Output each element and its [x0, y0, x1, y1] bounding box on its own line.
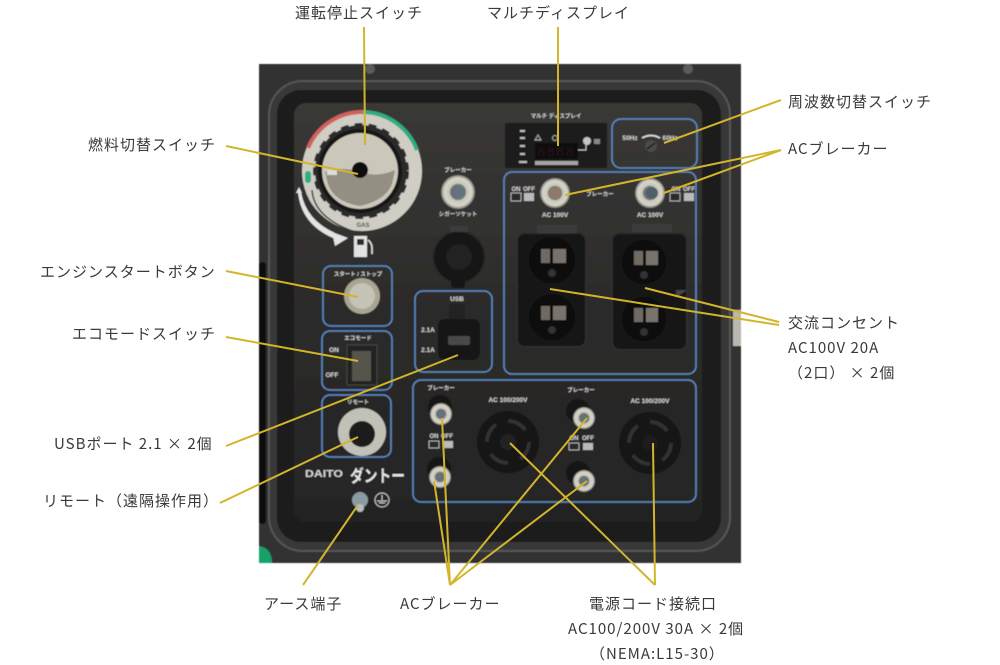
breaker and cigar socket — [433, 166, 485, 288]
label: frequency: 周波数切替スイッチ — [788, 91, 932, 112]
logo: DAITO — [305, 466, 405, 486]
box: AC 100/200V outlets: ON — [430, 434, 438, 440]
breaker and cigar socket: シガーソケット — [439, 210, 477, 218]
label: power connector: 電源コード接続口 — [589, 593, 717, 614]
label: USB port: USBポート 2.1 × 2個 — [54, 433, 213, 454]
right twist-lock socket — [619, 412, 681, 474]
right outlet — [612, 224, 687, 350]
box: remote connector — [322, 395, 391, 457]
logo: DAITO: DAITO — [305, 469, 343, 480]
breakers: ON — [672, 187, 680, 193]
left outlet — [517, 225, 586, 347]
label: NEMA: （NEMA:L15-30） — [590, 643, 725, 664]
box: eco mode switch: エコモード — [344, 335, 372, 342]
box: USB port: 2.1A — [421, 327, 435, 334]
logo: DAITO: ダントー — [350, 466, 405, 486]
bolts — [365, 64, 693, 74]
label: engine start button: エンジンスタートボタン — [40, 261, 216, 282]
box: frequency switch: 50Hz — [622, 135, 638, 142]
box: start/stop button — [323, 266, 392, 326]
breakers — [511, 178, 695, 219]
panel: faceplate — [294, 103, 702, 522]
photo: generator control panel — [259, 64, 741, 563]
box: frequency switch: 60Hz — [662, 135, 678, 142]
box: USB port: 2.1A — [421, 347, 435, 354]
box: AC 100/200V outlets: ブレーカー — [567, 386, 595, 394]
label: remote: リモート（遠隔操作用） — [43, 490, 219, 511]
breakers: OFF — [683, 187, 695, 193]
breakers: AC 100V — [637, 212, 664, 219]
side parts — [259, 262, 741, 563]
box: eco mode switch: OFF — [326, 372, 339, 379]
label: AC outlets count: （2口） × 2個 — [788, 362, 895, 383]
box: AC 100/200V outlets: AC 100/200V — [630, 398, 670, 405]
frame: outer housing — [269, 81, 730, 551]
label: multi display: マルチディスプレイ — [487, 2, 630, 23]
label: AC breaker bottom: ACブレーカー — [400, 593, 501, 614]
label: fuel switch: 燃料切替スイッチ — [88, 134, 216, 155]
breakers: OFF — [523, 187, 535, 193]
callout lines — [220, 27, 781, 585]
breakers: ブレーカー — [586, 190, 614, 198]
box: AC 100/200V outlets: ON — [570, 436, 578, 442]
box: USB port: USB — [450, 296, 464, 303]
label: ground: アース端子 — [264, 593, 342, 614]
label: AC outlets spec: AC100V 20A — [788, 337, 879, 358]
display group: multi display: マルチ ディスプレイ — [531, 112, 581, 120]
box: start/stop button: スタート / ストップ — [334, 270, 383, 278]
label: AC outlets: 交流コンセント — [788, 312, 900, 333]
left twist-lock socket — [477, 411, 539, 473]
box: AC 100V outlets — [504, 172, 696, 374]
breakers: AC 100V — [542, 212, 569, 219]
box: AC 100/200V outlets: OFF — [582, 436, 594, 442]
dial: fuel selector switch — [302, 111, 422, 232]
box: eco mode switch — [322, 331, 392, 390]
ground terminal — [352, 492, 389, 512]
label: AC breaker right: ACブレーカー — [788, 138, 889, 159]
dial: fuel selector switch: GAS — [356, 223, 370, 229]
box: AC 100/200V outlets — [413, 380, 696, 502]
label: power switch: 運転停止スイッチ — [295, 2, 423, 23]
box: AC 100/200V outlets: AC 100/200V — [488, 397, 528, 404]
icon: white curved arrow — [296, 187, 348, 246]
box: frequency switch — [612, 119, 697, 168]
display group: multi display — [505, 112, 607, 168]
display group: multi display: 8888 — [537, 145, 575, 161]
box: remote connector: リモート — [347, 399, 369, 406]
box: AC 100/200V outlets: OFF — [441, 434, 453, 440]
icon: fuel pump — [354, 236, 372, 257]
label: power connector spec: AC100/200V 30A × 2個 — [568, 618, 744, 639]
label: eco mode: エコモードスイッチ — [72, 323, 216, 344]
box: AC 100/200V outlets: ブレーカー — [427, 384, 455, 392]
breakers: ON — [512, 187, 520, 193]
box: USB port — [415, 291, 492, 372]
box: eco mode switch: ON — [329, 347, 339, 354]
breaker and cigar socket: ブレーカー — [444, 166, 472, 174]
